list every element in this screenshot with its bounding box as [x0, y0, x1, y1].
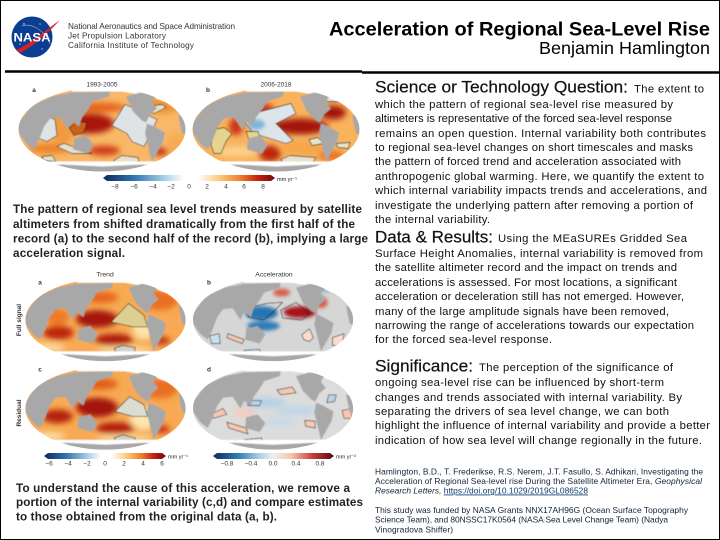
colour bar: trend: 2 — [122, 460, 126, 468]
caption: bottom maps: To understand the cause of this acceleration, we remove a — [16, 482, 350, 495]
colour bar: trend: 6 — [160, 460, 164, 468]
map: full signal trend — [25, 282, 186, 362]
citation — [375, 466, 703, 496]
column heading: Trend: Trend — [96, 272, 114, 278]
map: residual trend — [25, 370, 186, 450]
caption: bottom maps — [16, 482, 363, 524]
icon: NASA logo — [12, 16, 60, 58]
section: Data and Results: Surface Height Anomalies, internal variability is removed from — [375, 248, 703, 260]
colour bar: acceleration: −0.8 — [221, 460, 234, 468]
panel letters a, b, c, d: d — [207, 366, 211, 374]
colour bar: top maps: −4 — [149, 184, 157, 190]
section: Significance: The perception of the significance of — [479, 362, 674, 374]
colour bar: acceleration: mm yr⁻² — [336, 454, 356, 460]
map: 1993-2005 trends — [18, 90, 186, 172]
funding note: Science Team), and 80NSSC17K0564 (NASA Sea Level Change Team) (Nadya — [375, 514, 668, 524]
colour bar: top maps: 8 — [261, 184, 265, 190]
section: Data and Results: many of the large amplitude signals have been removed, — [375, 306, 669, 318]
section: Significance: highlight the influence of internal variability and provide a better — [375, 420, 710, 432]
section: Significance: ongoing sea-level rise can be influenced by short-term — [375, 377, 664, 389]
citation: Hamlington, B.D., T. Frederikse, R.S. Nerem, J.T. Fasullo, S. Adhikari, Investigating the — [375, 466, 703, 476]
map: full signal acceleration — [192, 282, 354, 362]
heading: Science or Technology Question: Science or Technology Question: — [375, 78, 628, 96]
section: Science or Technology Question: remains an open question. Internal variability both contributes — [375, 128, 706, 140]
colour bar: trend: mm yr⁻¹ — [168, 454, 188, 460]
funding note: Vinogradova Shiffer) — [375, 524, 453, 534]
header: institutions — [68, 22, 235, 50]
heading: Data and Results: Data & Results: — [375, 228, 493, 246]
colour bar: trend: −2 — [83, 460, 91, 468]
colour bar: acceleration: −0.4 — [245, 460, 258, 468]
colour bar: top maps: 4 — [224, 184, 228, 190]
panel letters a, b, c, d: c — [38, 366, 42, 374]
title: Acceleration of Regional Sea-Level Rise — [329, 18, 710, 40]
section: Science or Technology Question: which internal variability impacts trends and accelerations, and — [374, 185, 707, 197]
map label: 1993-2005: 1993-2005 — [86, 82, 118, 88]
colour bar: top maps: 0 — [187, 184, 191, 190]
section: Science or Technology Question: altimeters is representative of the forced sea-level response — [375, 113, 672, 125]
heading: Significance: Significance: — [375, 358, 473, 376]
section: Science or Technology Question: The extent to — [634, 84, 704, 96]
panel letter b: b — [206, 87, 210, 94]
funding note: This study was funded by NASA Grants NNX17AH96G (Ocean Surface Topography — [375, 505, 689, 515]
panel letters a, b, c, d — [38, 280, 211, 374]
caption: top maps: acceleration signal. — [13, 247, 125, 260]
colour bar: top maps: −6 — [130, 184, 138, 190]
section: Significance: indication of how sea level will change regionally in the future. — [375, 435, 702, 447]
caption: top maps: The pattern of regional sea level trends measured by satellite — [13, 203, 362, 216]
header: institutions: California Institute of Technology — [68, 41, 195, 50]
panel letters a, b, c, d: b — [207, 280, 211, 286]
section: Data and Results — [375, 228, 703, 346]
section: Science or Technology Question: anthropogenic global warming. Here, we quantify the extent to — [375, 171, 704, 183]
section: Data and Results: the satellite altimeter record and the impact on trends and — [375, 262, 677, 274]
colour bar: top maps: mm yr⁻¹ — [277, 177, 297, 183]
colour bar: top maps — [103, 175, 297, 190]
caption: bottom maps: portion of the internal variability (c,d) and compare estimates — [16, 496, 363, 509]
caption: top maps: record (a) to the second half of the record (b), implying a large — [13, 232, 368, 246]
header rule — [5, 72, 720, 73]
colour bar: top maps: −2 — [167, 184, 175, 190]
colour bar: acceleration: 0.4 — [291, 460, 301, 468]
section: Significance: changes and trends associated with internal variability. By — [375, 392, 682, 404]
caption: bottom maps: to those obtained from the original data (a, b). — [16, 510, 277, 524]
citation: Research Letters, https://doi.org/10.1029/2019GL086528 — [375, 486, 588, 496]
header: institutions: Jet Propulsion Laboratory — [68, 32, 167, 40]
colour bar: trend — [44, 453, 188, 468]
colour bar: trend: −4 — [64, 460, 72, 468]
section: Significance: separating the drivers of sea level change, we can both — [375, 406, 669, 418]
funding note — [375, 505, 689, 534]
section: Data and Results: acceleration or deceleration still has not emerged. However, — [375, 291, 684, 303]
panel letter a: a — [32, 87, 36, 94]
section: Science or Technology Question: the internal variability. — [375, 214, 490, 226]
section: Science or Technology Question: investigate the underlying pattern after removing a portion of — [375, 200, 694, 212]
author: Benjamin Hamlington — [539, 38, 710, 58]
panel letters a, b, c, d: a — [38, 280, 42, 286]
map: residual acceleration — [192, 370, 354, 450]
panel: bottom maps trend and acceleration — [16, 271, 359, 468]
colour bar: acceleration: 0.8 — [315, 460, 325, 468]
section: Science or Technology Question: the pattern of forced trend and acceleration associated with — [375, 156, 681, 168]
map: 2006-2018 trends — [192, 90, 360, 172]
section: Data and Results: narrowing the range of accelerations towards our expectation — [375, 320, 694, 332]
row label: Full signal: Full signal — [16, 304, 23, 336]
colour bar: acceleration: 0.0 — [268, 460, 278, 468]
row label: Residual: Residual — [16, 399, 23, 427]
section: Significance — [375, 358, 710, 447]
column heading: Acceleration: Acceleration — [255, 272, 293, 278]
section: Data and Results: Using the MEaSUREs Gridded Sea — [498, 233, 688, 245]
section: Science or Technology Question — [374, 78, 707, 226]
colour bar: top maps: −8 — [111, 184, 119, 190]
header: institutions: National Aeronautics and Space Administration — [68, 22, 235, 31]
citation: Acceleration of Regional Sea-level rise During the Satellite Altimeter Era, Geophysical — [375, 476, 703, 486]
caption: top maps — [13, 203, 368, 260]
colour bar: top maps: 2 — [205, 184, 209, 190]
panel: top maps 1993-2005 and 2006-2018 — [12, 80, 366, 190]
icon: NASA logo: NASA — [14, 32, 50, 44]
colour bar: acceleration — [213, 453, 356, 468]
colour bar: top maps: 6 — [242, 184, 246, 190]
section: Data and Results: for the forced sea-level response. — [375, 334, 552, 346]
section: Data and Results: accelerations is assessed. For most locations, a significant — [375, 277, 678, 289]
section: Science or Technology Question: to regional sea-level changes on short timescales and masks — [375, 142, 693, 154]
colour bar: trend: 4 — [141, 460, 145, 468]
map label: 2006-2018: 2006-2018 — [260, 82, 292, 88]
colour bar: trend: 0 — [103, 460, 107, 468]
section: Science or Technology Question: which the pattern of regional sea-level rise measured by — [374, 99, 673, 111]
colour bar: trend: −6 — [45, 460, 53, 468]
caption: top maps: altimeters from shifted dramatically from the first half of the — [13, 218, 355, 231]
